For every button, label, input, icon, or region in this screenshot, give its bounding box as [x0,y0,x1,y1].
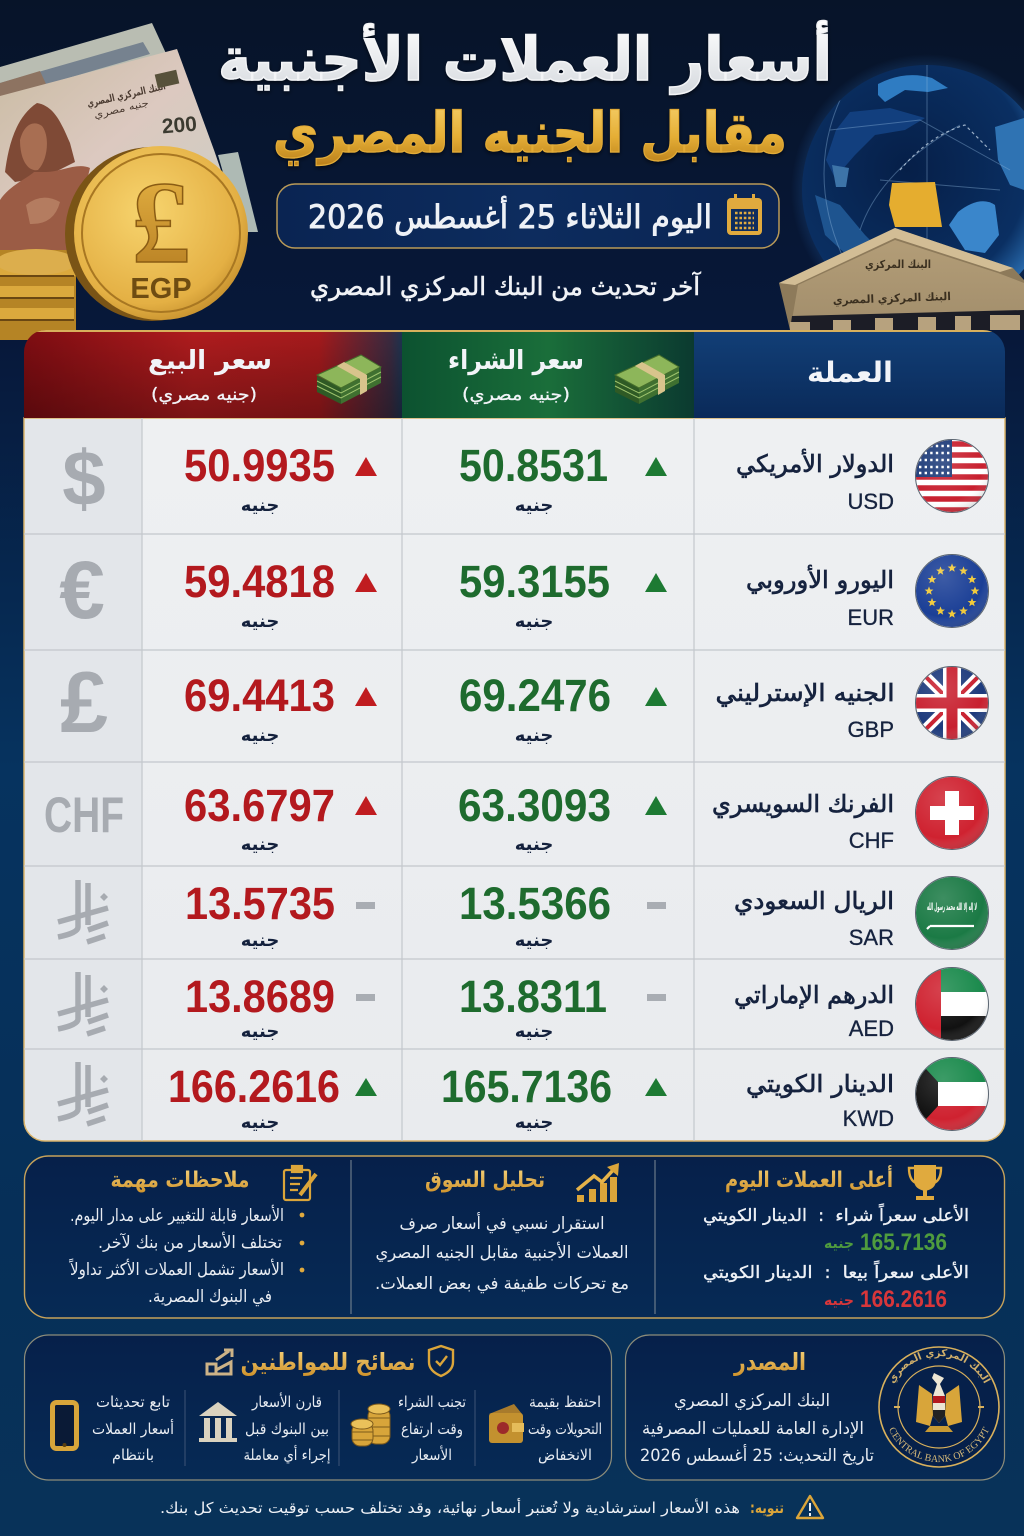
row: AED: جنيه [515,1021,553,1042]
important notes: الأسعار تشمل العملات الأكثر تداولاً [68,1258,284,1280]
row: USD: $ [62,434,106,522]
row: AED: جنيه [241,1021,279,1042]
row: CHF: 63.3093 [458,780,611,831]
row: CHF: الفرنك السويسري [712,790,894,818]
tip: follow updates [52,1393,174,1464]
tip: keep value [489,1393,602,1464]
icon: clipboard [284,1166,316,1200]
disclaimer [160,1496,823,1518]
row: USD: الدولار الأمريكي [736,449,894,478]
panel: citizen tips [24,1335,612,1480]
title: أسعار العملات الأجنبية [218,20,832,95]
illustration: central bank building [779,228,1024,330]
row: USD [63,439,989,514]
tip: keep value: احتفظ بقيمة [529,1393,601,1411]
row: SAR: الريال السعودي [734,887,894,915]
tip: avoid buying: الأسعار [411,1445,452,1464]
row: GBP: جنيه [515,725,553,746]
row: CHF: جنيه [515,834,553,855]
row: USD: USD [848,489,894,514]
icon: calendar [727,194,762,235]
row: KWD [58,1057,989,1133]
icon: bank [199,1402,237,1442]
illustration: central bank building: البنك المركزي [865,258,931,271]
column header: sell: سعر البيع [148,346,272,376]
tip: avoid buying: تجنب الشراء [398,1393,466,1411]
flag: Switzerland [915,776,989,850]
row: AED: 13.8689 [185,971,335,1022]
row: CHF: CHF [849,828,894,853]
row: AED: 13.8311 [459,971,607,1022]
row: USD: جنيه [241,495,279,516]
flag: Kuwait [915,1057,989,1131]
important notes: تختلف الأسعار من بنك لآخر. [98,1232,282,1253]
row: CHF: 63.6797 [184,780,335,831]
row: USD: جنيه [515,495,553,516]
panel: citizen tips: نصائح للمواطنين [240,1348,416,1376]
icon: central bank seal: البنك المركزي المصري [892,1349,991,1384]
tip: follow updates: تابع تحديثات [96,1393,170,1411]
icon: cash stack [317,355,381,404]
row: KWD: جنيه [241,1112,279,1133]
tip: follow updates: بانتظام [112,1446,154,1464]
icon: phone [52,1402,76,1448]
market analysis: تحليل السوق [425,1168,545,1193]
row: AED: AED [849,1016,894,1041]
row: EUR: جنيه [515,611,553,632]
panel: source [624,1334,1006,1481]
column header: sell [148,346,381,405]
row: EUR: جنيه [241,611,279,632]
top currencies [703,1164,969,1313]
row: CHF [44,776,989,855]
illustration: globe with Egypt [795,58,1024,280]
eagle emblem [916,1373,962,1432]
row: SAR: جنيه [515,930,553,951]
important notes [68,1166,316,1307]
icon: wallet [489,1404,524,1443]
flag: USA [915,439,989,513]
row: AED: الدرهم الإماراتي [734,981,894,1009]
illustration: gold pound coin: £ [132,157,190,288]
tip: avoid buying [351,1393,466,1464]
date pill: اليوم الثلاثاء 25 أغسطس 2026 [308,196,712,236]
illustration: banknotes: 200 [161,113,198,139]
top currencies: الأعلى سعراً شراء : الدينار الكويتي [703,1202,969,1226]
panel: source: الإدارة العامة للعمليات المصرفية [642,1419,864,1439]
row: EUR: اليورو الأوروبي [746,565,894,594]
tip: compare banks: بين البنوك قبل [245,1420,329,1438]
icon: rising chart [577,1163,619,1202]
important notes: الأسعار قابلة للتغيير على مدار اليوم. [70,1205,284,1226]
market analysis: مع تحركات طفيفة في بعض العملات. [375,1274,629,1294]
tip: compare banks: إجراء أي معاملة [244,1445,330,1465]
row: GBP: جنيه [241,725,279,746]
row: GBP: 69.2476 [459,670,611,721]
column header: currency: العملة [807,356,893,389]
icon: shield [429,1346,453,1376]
row: EUR: EUR [848,605,894,630]
update note: آخر تحديث من البنك المركزي المصري [310,271,701,301]
icon: central bank seal: CENTRAL BANK OF EGYPT [890,1426,989,1462]
illustration: portrait on banknote [0,103,90,250]
tip: compare banks: قارن الأسعار [251,1392,322,1411]
tip: keep value: الانخفاض [538,1446,592,1464]
illustration: gold pound coin [65,146,248,321]
row: KWD: الدينار الكويتي [746,1070,894,1098]
illustration: coin stack [0,249,76,340]
top currencies: 166.2616 [860,1286,947,1313]
illustration: banknotes: جنيه مصري [93,98,150,121]
disclaimer: تنويه: [750,1499,784,1517]
date pill [277,184,779,248]
row: GBP: 69.4413 [184,670,335,721]
row: EUR: 59.3155 [459,556,610,607]
table body [24,418,1005,1141]
illustration: banknotes: البنك المركزي المصري [86,81,167,110]
tip: follow updates: أسعار العملات [92,1419,174,1438]
top currencies: أعلى العملات اليوم [725,1164,893,1193]
icon: riyal symbol [58,880,108,942]
column header: buy: سعر الشراء [448,346,584,376]
icon: hand and graph [207,1350,232,1374]
column header: sell: (جنيه مصري) [151,385,257,405]
market analysis: استقرار نسبي في أسعار صرف [400,1212,604,1234]
icon: coins [351,1404,390,1446]
row: KWD: KWD [843,1106,894,1131]
icon: warning [797,1496,823,1518]
top currencies: 165.7136 [860,1229,947,1256]
flag: UK [915,666,989,740]
row: SAR: جنيه [241,930,279,951]
important notes: في البنوك المصرية. [148,1287,272,1307]
icon: trophy [909,1165,941,1200]
row: EUR: 59.4818 [184,556,335,607]
panel: summary [24,1156,1004,1318]
flag: UAE [915,967,989,1041]
icon: riyal symbol [58,972,108,1034]
column header: buy: (جنيه مصري) [462,385,570,405]
subtitle: مقابل الجنيه المصري [273,101,787,166]
icon: Egypt map [889,182,942,227]
illustration: central bank building: البنك المركزي المصري [833,290,951,307]
rates table [24,330,1005,1141]
panel: source: البنك المركزي المصري [674,1391,830,1411]
row: AED [58,967,989,1042]
row: GBP: £ [60,655,108,751]
illustration: gold pound coin: EGP [130,273,192,305]
panel: source: تاريخ التحديث: 25 أغسطس 2026 [640,1444,874,1466]
table header [24,330,1005,418]
tip: keep value: التحويلات وقت [528,1420,602,1438]
column header: buy [448,346,679,405]
tip: avoid buying: وقت ارتفاع [401,1420,463,1438]
illustration: banknotes [0,23,258,262]
row: KWD: جنيه [515,1112,553,1133]
flag: Saudi Arabia [915,876,989,950]
icon: central bank seal [878,1346,1000,1468]
top currencies: جنيه [824,1293,854,1309]
row: USD: 50.9935 [184,440,335,491]
top currencies: جنيه [824,1236,854,1252]
row: EUR: € [59,545,105,636]
tip: compare banks [199,1392,330,1465]
row: KWD: 165.7136 [441,1061,612,1112]
row: EUR [60,554,989,630]
row: SAR: 13.5366 [459,878,611,929]
market analysis: العملات الأجنبية مقابل الجنيه المصري [376,1242,628,1263]
row: CHF: CHF [44,787,124,843]
row: GBP [61,666,989,744]
row: KWD: 166.2616 [168,1061,340,1112]
row: USD: 50.8531 [459,440,608,491]
top currencies: الأعلى سعراً بيعا : الدينار الكويتي [703,1259,969,1283]
row: SAR [58,876,989,951]
row: GBP: GBP [848,717,894,742]
row: CHF: جنيه [241,834,279,855]
row: GBP: الجنيه الإسترليني [716,679,894,707]
row: SAR: SAR [849,925,894,950]
icon: riyal symbol [58,1062,108,1124]
icon: cash stack [615,355,679,404]
flag: EU [915,554,989,628]
disclaimer: هذه الأسعار استرشادية ولا تُعتبر أسعار نهائية، وقد تختلف حسب توقيت تحديث كل بنك. [160,1498,740,1517]
market analysis [375,1163,629,1294]
panel: source: المصدر [733,1348,806,1376]
row: SAR: 13.5735 [185,878,335,929]
important notes: ملاحظات مهمة [110,1168,250,1193]
